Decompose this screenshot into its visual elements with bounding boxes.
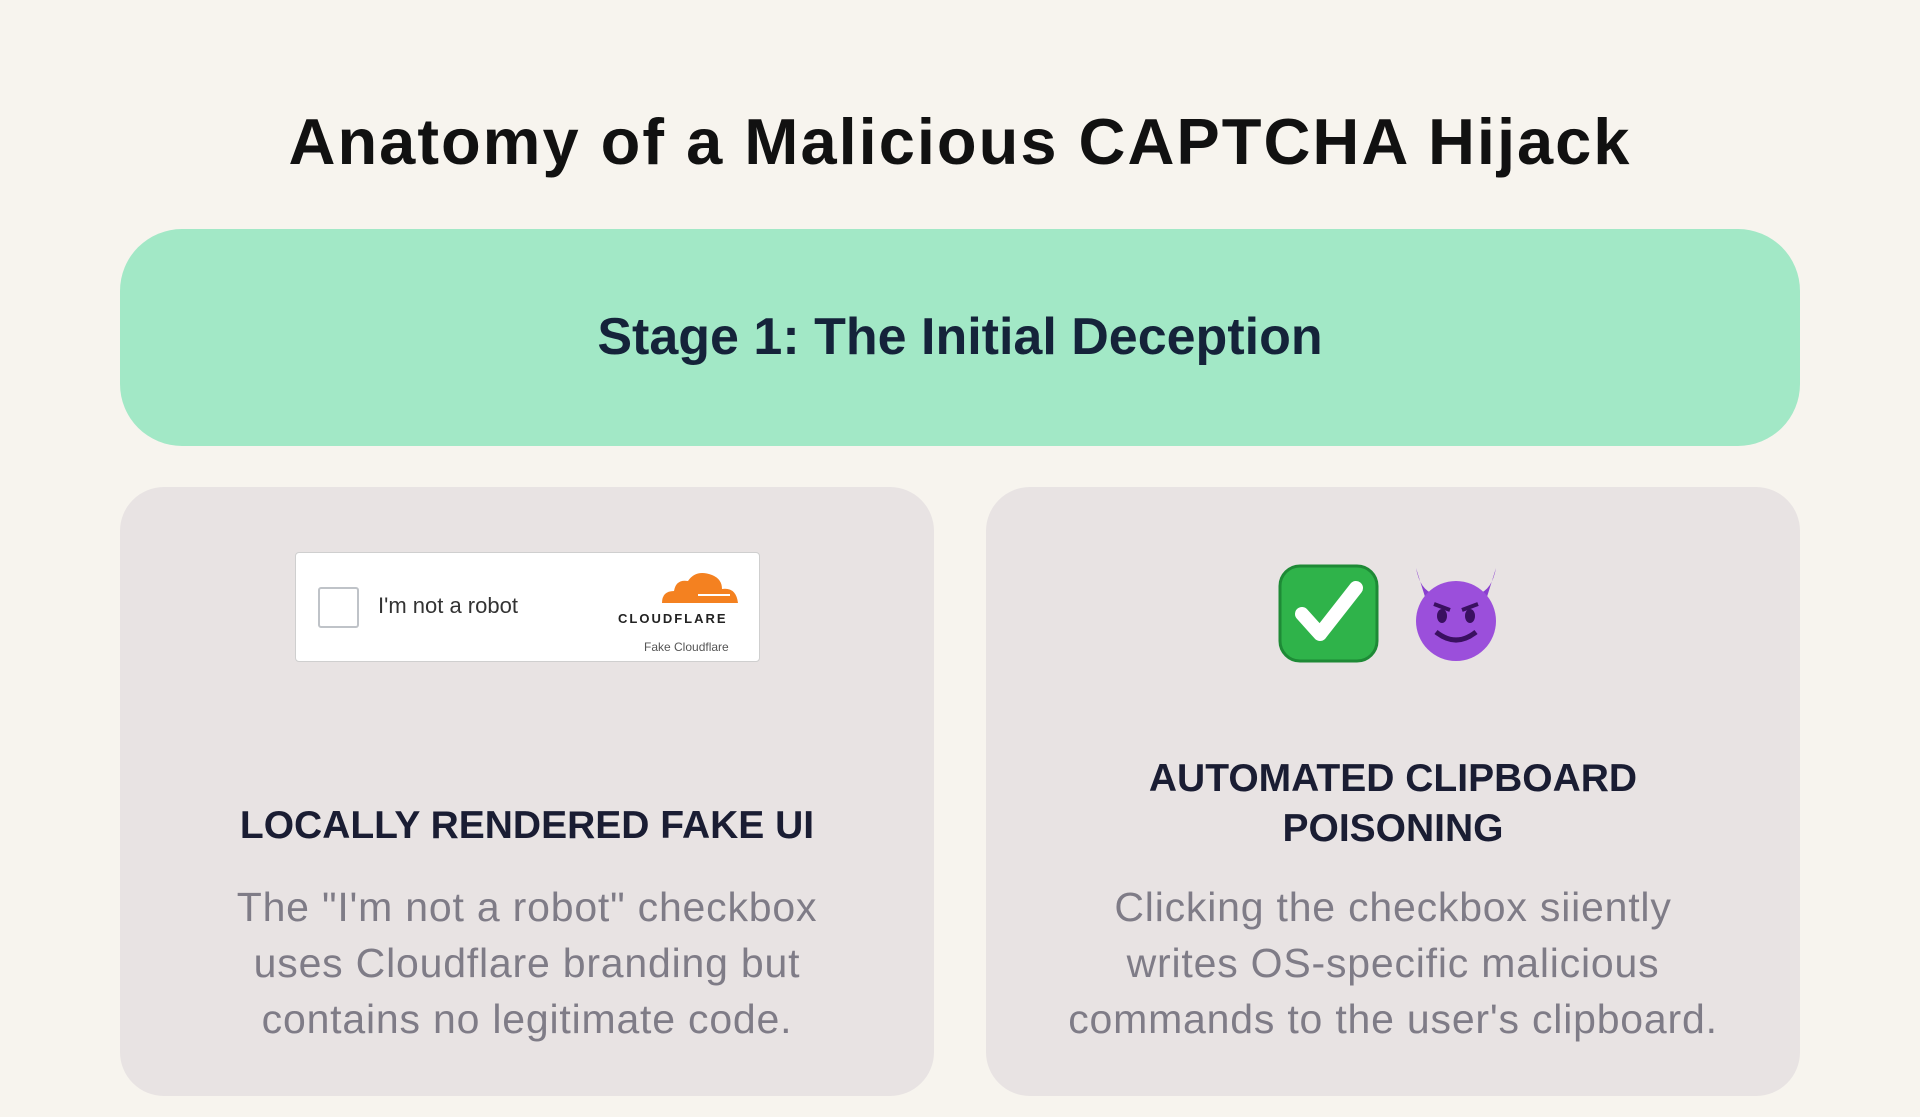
body text bbox=[237, 884, 817, 1042]
heading: LOCALLY RENDERED FAKE UI bbox=[240, 804, 814, 847]
heading bbox=[1149, 757, 1637, 850]
body text: contains no legitimate code. bbox=[262, 996, 792, 1042]
panel: clipboard poisoning bbox=[986, 487, 1800, 1096]
body text: Clicking the checkbox siiently bbox=[1114, 884, 1672, 930]
heading: AUTOMATED CLIPBOARD bbox=[1149, 757, 1637, 800]
body text bbox=[1068, 884, 1718, 1042]
body text: writes OS-specific malicious bbox=[1127, 940, 1659, 986]
panel: fake UI bbox=[120, 487, 934, 1096]
body text: uses Cloudflare branding but bbox=[254, 940, 800, 986]
icon: cloudflare cloud bbox=[662, 573, 738, 603]
banner: stage 1 bbox=[120, 229, 1800, 446]
icon: devil face bbox=[1416, 568, 1496, 661]
icon: check mark bbox=[1278, 564, 1378, 662]
banner: stage 1: Stage 1: The Initial Deception bbox=[597, 308, 1323, 366]
caption: Fake Cloudflare bbox=[644, 640, 729, 654]
title: Anatomy of a Malicious CAPTCHA Hijack bbox=[289, 105, 1631, 178]
body text: commands to the user's clipboard. bbox=[1068, 996, 1718, 1042]
fake captcha widget bbox=[295, 552, 760, 662]
cloudflare wordmark: CLOUDFLARE bbox=[618, 611, 728, 626]
heading: POISONING bbox=[1282, 807, 1504, 850]
checkbox bbox=[318, 587, 359, 628]
checkbox label: I'm not a robot bbox=[378, 593, 518, 618]
body text: The "I'm not a robot" checkbox bbox=[237, 884, 817, 930]
